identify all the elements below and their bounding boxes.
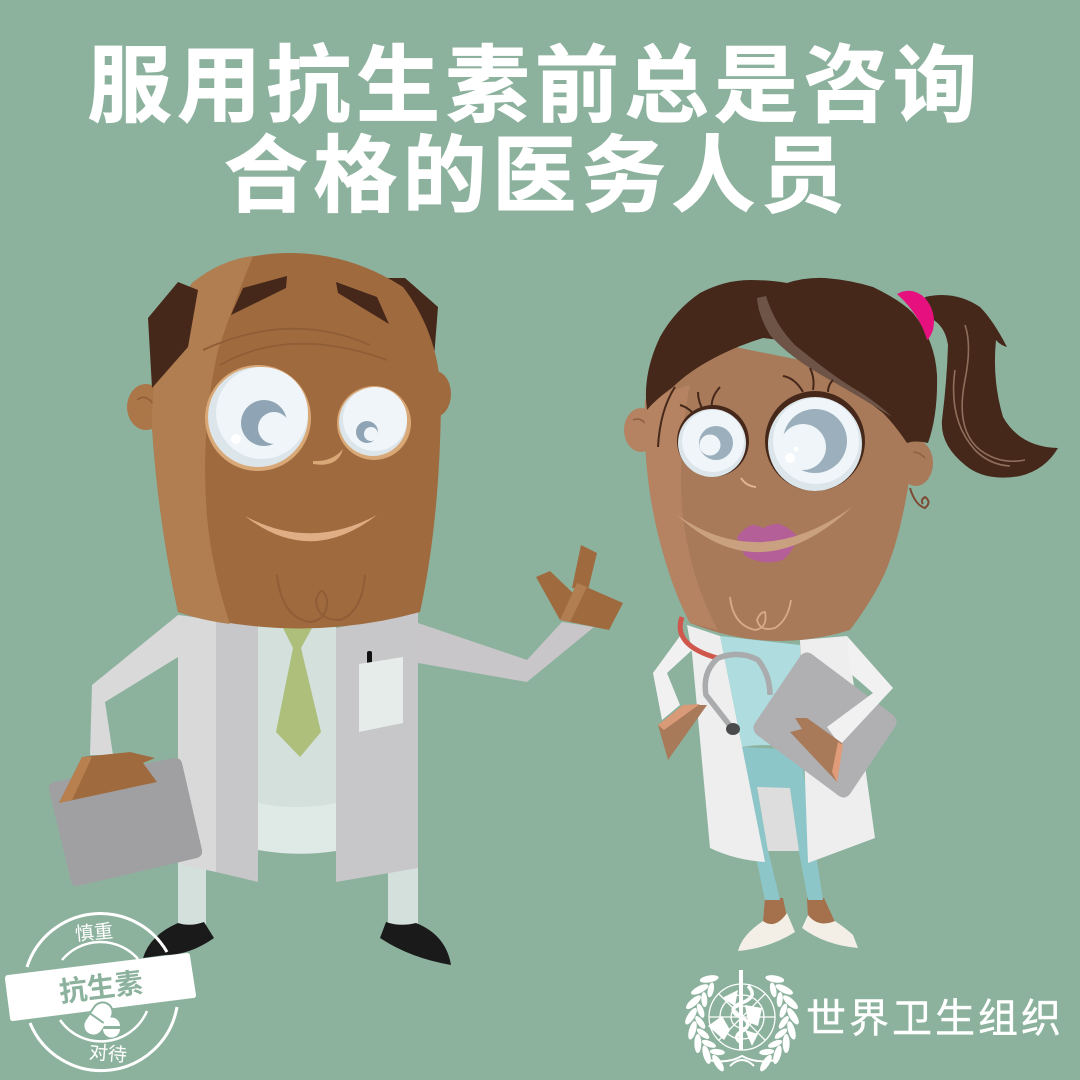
face highlight: [645, 385, 718, 630]
feet: [763, 898, 835, 926]
raised hand: [536, 545, 623, 630]
emblem: [683, 970, 801, 1073]
forehead wrinkles: [203, 329, 387, 365]
chin: [277, 575, 365, 622]
right arm: [827, 636, 893, 745]
continents: [708, 990, 762, 1046]
chin: [730, 597, 791, 630]
stethoscope: [680, 617, 770, 735]
nose: [741, 478, 756, 487]
title: [87, 39, 983, 223]
hair wisp: [658, 387, 675, 447]
smile: [677, 507, 852, 552]
right eye: [765, 368, 865, 491]
ears: [624, 408, 933, 486]
shoes: [143, 922, 451, 965]
badge top text: 慎重: [74, 920, 114, 946]
left hair: [148, 282, 198, 388]
face: [152, 253, 441, 628]
left hand: [658, 704, 707, 760]
title: 合格的医务人员: [224, 129, 850, 223]
left arm: [90, 615, 178, 755]
organization name: 世界卫生组织: [806, 997, 1064, 1041]
pill icon: [79, 999, 120, 1039]
title: 服用抗生素前总是咨询: [87, 39, 983, 133]
nose: [313, 449, 343, 465]
badge: handle antibiotics with care: [5, 914, 196, 1071]
smile: [245, 515, 377, 541]
head: [127, 253, 451, 628]
wreath stems: [708, 1056, 776, 1066]
shoes: [738, 913, 858, 951]
face highlight: [152, 256, 253, 624]
left arm: [653, 636, 692, 720]
character: female doctor: [624, 278, 1058, 951]
badge bottom text: 对待: [88, 1041, 128, 1067]
staff and serpent: [733, 970, 752, 1050]
right arm: [418, 622, 594, 682]
right eye: [337, 386, 411, 460]
scrubs: [720, 636, 823, 900]
shirt: [258, 620, 336, 854]
laurel wreath: [683, 974, 801, 1073]
tablet clipboard: [753, 652, 897, 798]
legs: [178, 860, 418, 926]
character: male doctor: [49, 253, 623, 965]
face: [645, 340, 915, 641]
logo: World Health Organization: [683, 970, 1064, 1073]
pocket and pen: [359, 651, 403, 732]
clipboard: [49, 758, 202, 886]
left eye: [205, 365, 311, 471]
hand on clipboard: [59, 752, 157, 803]
hair: [646, 278, 937, 443]
lab coat: [687, 625, 875, 863]
left eye: [677, 387, 749, 477]
head: [624, 278, 937, 641]
badge banner text: 抗生素: [57, 967, 145, 1008]
lab coat: [178, 612, 418, 882]
eyebrows: [231, 276, 389, 324]
ponytail: [925, 295, 1058, 478]
right hair: [385, 278, 438, 358]
earring: [910, 488, 928, 508]
hair tie: [897, 291, 934, 340]
badge rings: [27, 914, 177, 1071]
globe: [709, 984, 775, 1050]
hair streak: [757, 296, 892, 417]
badge banner: [5, 953, 196, 1021]
necktie: [276, 628, 321, 757]
right hand: [790, 718, 843, 782]
ears: [127, 371, 451, 430]
lips: [737, 524, 798, 562]
